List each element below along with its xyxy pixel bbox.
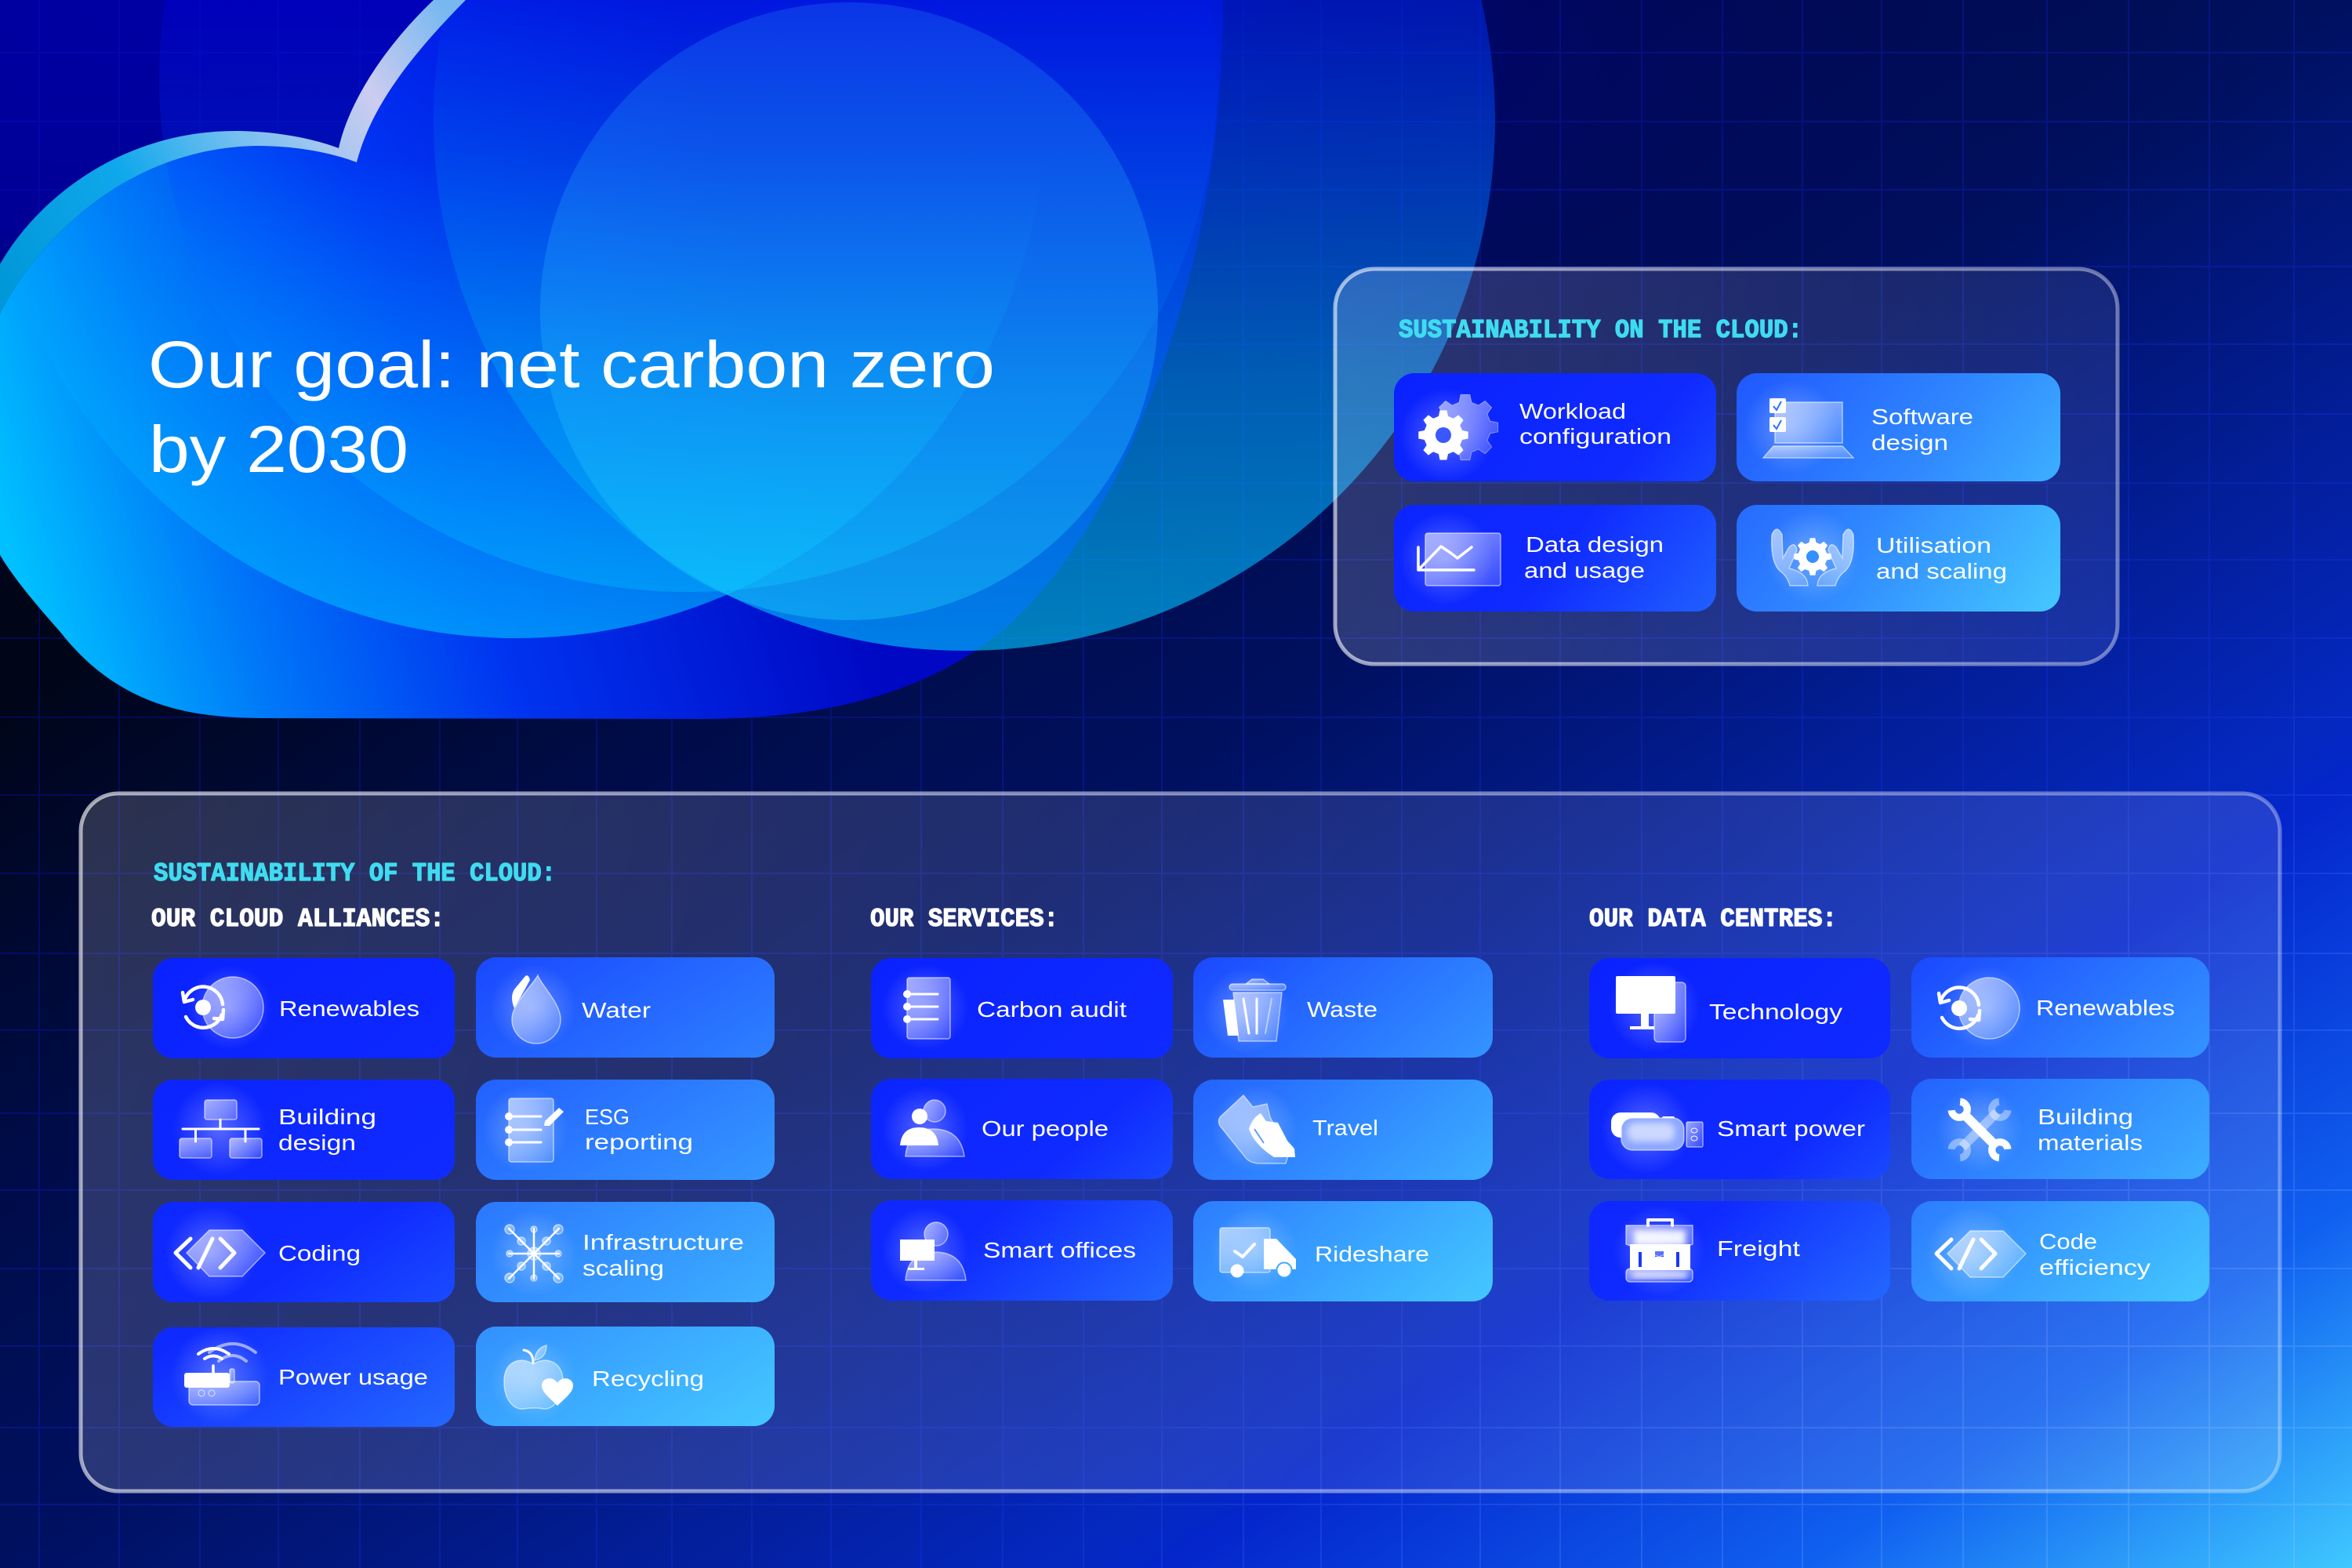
heading: sustainability on the cloud: SUSTAINABILITY ON THE CLOUD: [1399, 316, 1802, 345]
card: freight [1589, 1201, 1890, 1301]
label: Code [2039, 1229, 2097, 1254]
label [2039, 1229, 2151, 1279]
cloud illustration [0, 0, 1495, 719]
column: our services [870, 905, 1493, 1301]
label [278, 1105, 376, 1155]
label: Rideshare [1315, 1242, 1429, 1266]
icon: people [882, 1086, 968, 1172]
label: Data design [1526, 532, 1664, 557]
card: software design [1737, 373, 2060, 481]
heading: sustainability of the cloud: SUSTAINABILITY OF THE CLOUD: [154, 859, 556, 888]
label: Coding [278, 1241, 361, 1265]
card: infrastructure scaling [476, 1202, 775, 1302]
title: Our goal: net carbon zero [148, 328, 995, 401]
label: Smart power [1717, 1116, 1865, 1141]
label [1871, 405, 1973, 455]
icon: monitor and phone [1609, 962, 1700, 1053]
label: ESG [585, 1105, 630, 1129]
card: ESG reporting [476, 1080, 775, 1180]
icon: person with monitor [882, 1207, 968, 1294]
card: renewables [1911, 957, 2209, 1058]
label: Travel [1312, 1116, 1378, 1140]
label: Building [2038, 1105, 2133, 1129]
label: Waste [1307, 997, 1377, 1022]
icon: briefcase [1613, 1205, 1704, 1296]
icon: network hub [491, 1210, 577, 1297]
label: Smart offices [983, 1238, 1136, 1262]
label: design [1871, 430, 1948, 455]
icon: laptop checklist [1744, 380, 1853, 474]
card: travel [1193, 1080, 1493, 1180]
icon: code [1926, 1207, 2026, 1301]
card: code efficiency [1911, 1201, 2209, 1301]
card: smart offices [871, 1200, 1173, 1301]
card: water [476, 957, 775, 1058]
column: our cloud alliances [151, 905, 775, 1427]
background top-left blue glow [0, 0, 2352, 784]
title [148, 328, 995, 486]
icon: delivery truck [1211, 1207, 1298, 1294]
label: Infrastructure [583, 1230, 744, 1254]
label [1876, 533, 2007, 583]
card: building design [153, 1080, 455, 1180]
icon: org structure [172, 1082, 267, 1176]
label: Water [582, 998, 651, 1022]
card: workload configuration [1394, 373, 1716, 482]
icon: shoe on map [1211, 1086, 1298, 1172]
label [2038, 1105, 2143, 1155]
icon: router [171, 1327, 268, 1425]
panel: sustainability of the cloud [81, 793, 2280, 1491]
icon: renewables [183, 965, 271, 1050]
subheading: OUR CLOUD ALLIANCES: [151, 905, 445, 934]
icon: bin [1203, 968, 1290, 1054]
icon: code [165, 1206, 265, 1300]
card: renewables [153, 958, 455, 1058]
icon: renewables [1939, 966, 2027, 1051]
label: reporting [585, 1130, 693, 1154]
label [583, 1230, 744, 1280]
icon: hands holding gear [1766, 510, 1860, 604]
label: Utilisation [1876, 533, 1991, 557]
card: coding [153, 1202, 455, 1302]
label: Power usage [278, 1365, 428, 1389]
title: by 2030 [149, 412, 408, 486]
card: rideshare [1193, 1201, 1493, 1301]
label [1524, 532, 1664, 583]
card: carbon audit [871, 958, 1173, 1058]
label: Workload [1519, 399, 1626, 423]
label: scaling [583, 1256, 664, 1280]
card: waste [1193, 957, 1493, 1058]
subheading: OUR SERVICES: [870, 905, 1058, 934]
label: efficiency [2039, 1255, 2151, 1279]
panel: sustainability on the cloud [1335, 269, 2118, 664]
label: Renewables [279, 996, 419, 1021]
card: technology [1589, 958, 1890, 1058]
icon: chart [1399, 511, 1501, 605]
card: our people [871, 1079, 1173, 1179]
label: Renewables [2036, 996, 2175, 1020]
label: materials [2038, 1131, 2143, 1155]
label: Building [278, 1105, 376, 1129]
label: Carbon audit [977, 997, 1127, 1022]
card: data design and usage [1394, 505, 1716, 612]
icon: apple and heart [490, 1337, 576, 1423]
label: Recycling [592, 1367, 704, 1391]
icon: document [482, 1086, 568, 1172]
column: our data centres [1589, 905, 2209, 1301]
subheading: OUR DATA CENTRES: [1589, 905, 1837, 934]
label [1519, 399, 1671, 448]
icon: audit document [882, 964, 968, 1051]
label: Freight [1717, 1236, 1800, 1261]
label: Technology [1709, 1000, 1842, 1024]
label: design [278, 1131, 356, 1155]
icon: gears [1399, 388, 1498, 482]
icon: power plug [1601, 1083, 1703, 1174]
label: and scaling [1876, 559, 2007, 583]
icon: crossed wrenches [1936, 1087, 2023, 1173]
label: Software [1871, 405, 1973, 429]
label: and usage [1524, 558, 1645, 583]
card: smart power [1589, 1080, 1890, 1179]
label: configuration [1519, 424, 1671, 448]
card: power usage [153, 1327, 455, 1427]
icon: water drop [490, 964, 576, 1051]
label: Our people [982, 1116, 1109, 1141]
card: building materials [1911, 1079, 2209, 1179]
card: recycling [476, 1327, 775, 1426]
label [585, 1105, 693, 1154]
card: utilisation and scaling [1737, 505, 2060, 612]
